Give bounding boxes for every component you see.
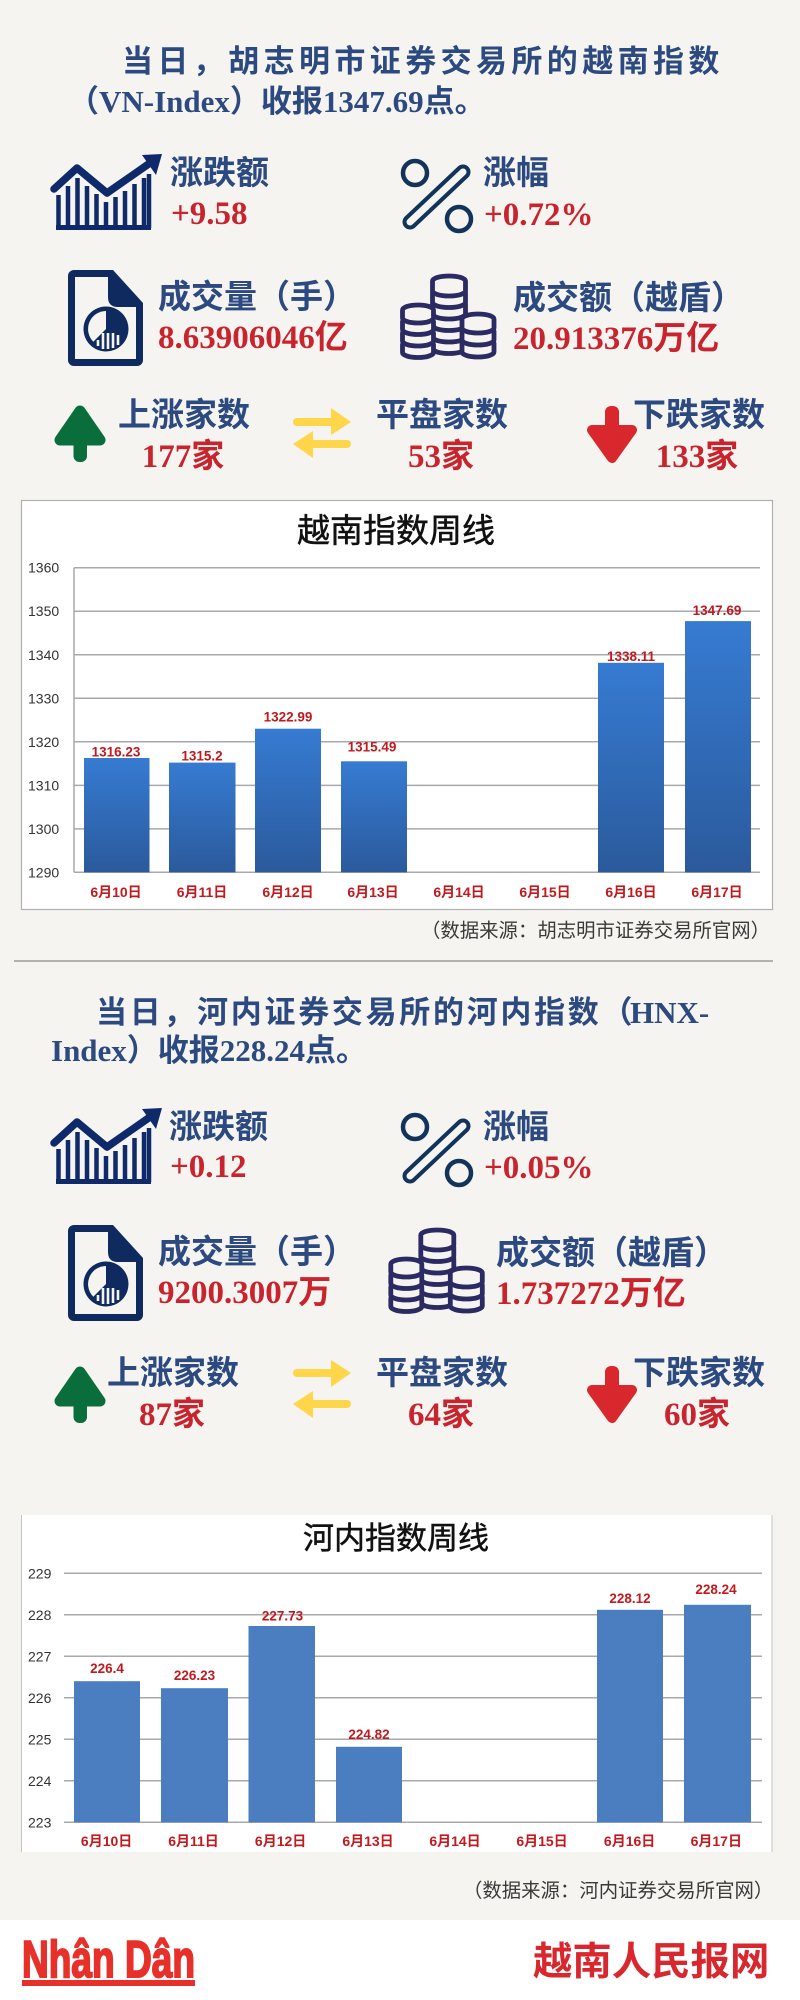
stat: price change	[170, 154, 269, 232]
stat: turnover: 20.913376万亿	[513, 320, 719, 357]
icon: down arrow	[592, 406, 632, 458]
y axis labels: 225	[28, 1731, 52, 1747]
stat: volume: 9200.3007万	[158, 1275, 331, 1311]
value labels: 1338.11	[607, 649, 656, 664]
x axis labels: 6月15日	[516, 1833, 568, 1849]
y axis labels: 228	[28, 1607, 52, 1623]
y axis labels: 1310	[28, 777, 59, 793]
bars	[84, 621, 751, 872]
value labels: 1347.69	[693, 603, 741, 618]
icon: unchanged arrows	[293, 408, 351, 458]
stat: volume: 8.63906046亿	[158, 319, 348, 356]
icon: document with pie chart	[68, 270, 143, 366]
x axis labels: 6月17日	[691, 1833, 742, 1849]
stat: decliners: 133家	[656, 438, 738, 475]
icon: percent	[403, 1115, 471, 1185]
stat: percent change	[483, 154, 594, 233]
chart title: 越南指数周线	[297, 512, 495, 549]
stat: advancers: 87家	[139, 1396, 205, 1433]
stat: decliners	[633, 1354, 765, 1433]
stat: volume: 成交量（手）	[158, 1233, 356, 1270]
footer band	[0, 1920, 800, 2000]
section: HNX-Index	[21, 995, 773, 1902]
chart title: 河内指数周线	[303, 1521, 489, 1556]
x axis labels	[81, 1833, 742, 1849]
value labels: 227.73	[262, 1608, 304, 1624]
value labels: 1316.23	[92, 744, 141, 760]
value labels: 226.23	[174, 1668, 216, 1683]
x axis labels: 6月11日	[168, 1833, 219, 1849]
stat: advancers: 上涨家数	[118, 396, 250, 433]
stat: price change	[169, 1108, 268, 1185]
stat: price change: 涨跌额	[170, 154, 269, 191]
stat: price change: 涨跌额	[169, 1108, 268, 1145]
value labels: 228.24	[695, 1582, 737, 1597]
x axis labels: 6月13日	[347, 884, 399, 900]
x axis labels: 6月12日	[262, 884, 314, 900]
x axis labels: 6月17日	[691, 884, 743, 900]
stat: percent change: +0.05%	[484, 1150, 594, 1186]
source note: （数据来源：河内证券交易所官网）	[463, 1880, 773, 1902]
icon: unchanged arrows	[293, 1360, 351, 1418]
heading: HNX-Index close: Index）收报228.24点。	[51, 1033, 367, 1068]
x axis labels	[90, 884, 743, 900]
x axis labels: 6月15日	[519, 884, 571, 900]
icon: rising chart	[54, 1108, 162, 1184]
x axis labels: 6月16日	[604, 1833, 655, 1849]
x axis labels: 6月10日	[90, 884, 142, 900]
heading: HNX-Index close	[51, 995, 709, 1068]
heading: HNX-Index close: HNX-	[630, 995, 709, 1030]
stat: advancers	[107, 1354, 239, 1433]
site name: 越南人民报网	[533, 1940, 769, 1984]
stat: percent change: +0.72%	[484, 197, 594, 233]
stat: volume: 成交量（手）	[158, 278, 356, 315]
stat: unchanged	[376, 396, 508, 475]
y axis labels: 227	[28, 1648, 52, 1664]
logo: Nhan Dan: Nhân Dân	[22, 1931, 195, 1989]
value labels	[90, 1582, 737, 1742]
stat: advancers: 177家	[142, 438, 224, 475]
x axis labels: 6月14日	[433, 884, 485, 900]
value labels: 224.82	[348, 1727, 390, 1742]
stat: volume	[158, 278, 356, 356]
stat: unchanged: 53家	[408, 438, 474, 475]
stat: price change: +9.58	[171, 196, 248, 232]
chart: HNX-Index weekly	[21, 1515, 772, 1852]
y axis labels: 229	[28, 1565, 52, 1581]
y axis labels	[28, 560, 59, 880]
y axis labels: 1320	[28, 734, 59, 750]
icon: down arrow	[592, 1366, 632, 1418]
icon: document with pie chart	[68, 1225, 143, 1321]
stat: decliners	[633, 396, 765, 475]
stat: turnover: 成交额（越盾）	[496, 1234, 727, 1271]
heading: VN-Index close: 当日，胡志明市证券交易所的越南指数	[122, 44, 724, 79]
stat: turnover	[513, 279, 744, 357]
chart: VN-Index weekly	[22, 500, 772, 910]
x axis labels: 6月12日	[255, 1833, 306, 1849]
y axis labels: 224	[28, 1773, 52, 1789]
y axis labels: 1340	[28, 647, 59, 663]
stat: turnover	[496, 1234, 727, 1312]
stat: percent change: 涨幅	[483, 1108, 549, 1145]
stat: unchanged: 平盘家数	[376, 396, 508, 433]
y axis labels: 1290	[28, 864, 59, 880]
heading: VN-Index close	[68, 44, 724, 119]
icon: percent	[403, 161, 471, 231]
stat: turnover: 1.737272万亿	[496, 1275, 686, 1312]
stat: unchanged	[376, 1354, 508, 1433]
value labels: 1315.2	[181, 748, 223, 764]
stat: unchanged: 平盘家数	[376, 1354, 508, 1391]
stat: percent change: 涨幅	[483, 154, 549, 191]
section: VN-Index	[22, 44, 772, 942]
x axis labels: 6月10日	[81, 1833, 132, 1849]
icon: rising chart	[54, 154, 162, 230]
y axis labels	[28, 1565, 52, 1830]
value labels: 226.4	[90, 1661, 124, 1676]
value labels	[92, 603, 741, 764]
heading: VN-Index close: （VN-Index）收报1347.69点。	[68, 84, 486, 119]
stat: percent change	[483, 1108, 594, 1186]
x axis labels: 6月13日	[342, 1833, 394, 1849]
stat: decliners: 下跌家数	[633, 396, 765, 433]
icon: up arrow	[60, 411, 100, 462]
y axis labels: 1330	[28, 690, 59, 706]
bars	[74, 1605, 751, 1822]
stat: decliners: 60家	[664, 1396, 730, 1433]
source note: （数据来源：胡志明市证券交易所官网）	[421, 920, 770, 942]
stat: advancers: 上涨家数	[107, 1354, 239, 1391]
stat: unchanged: 64家	[408, 1396, 474, 1433]
icon: up arrow	[60, 1372, 100, 1423]
value labels: 1315.49	[348, 740, 396, 754]
y axis labels: 1350	[28, 603, 59, 619]
y axis labels: 226	[28, 1690, 52, 1706]
y axis labels: 1360	[28, 560, 59, 576]
value labels: 228.12	[609, 1591, 651, 1606]
y axis labels: 1300	[28, 821, 59, 837]
y axis labels: 223	[28, 1814, 52, 1830]
stat: volume	[158, 1233, 356, 1311]
x axis labels: 6月11日	[177, 884, 227, 900]
stat: advancers	[118, 396, 250, 475]
stat: decliners: 下跌家数	[633, 1354, 765, 1391]
icon: coin stacks	[402, 276, 494, 358]
value labels: 1322.99	[264, 710, 312, 724]
stat: price change: +0.12	[170, 1149, 247, 1185]
x axis labels: 6月16日	[605, 884, 657, 900]
heading: HNX-Index close: 当日，河内证券交易所的河内指数（	[96, 995, 635, 1030]
x axis labels: 6月14日	[429, 1833, 481, 1849]
stat: turnover: 成交额（越盾）	[513, 279, 744, 316]
icon: coin stacks	[391, 1230, 482, 1312]
